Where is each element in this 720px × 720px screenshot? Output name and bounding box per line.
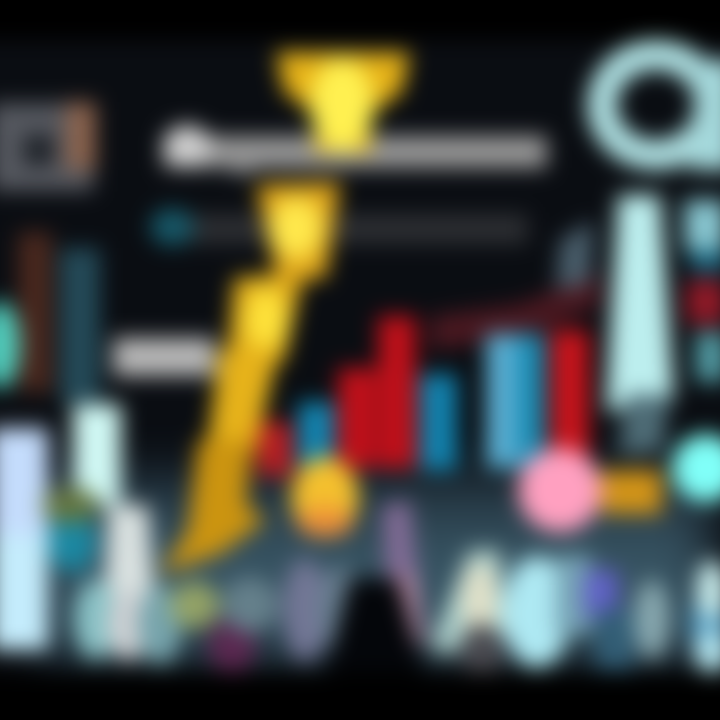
bottom black band (0, 672, 720, 720)
left column bars (0, 232, 100, 402)
orange tag (602, 470, 662, 514)
icon: golden trophy and lightning trail (160, 52, 410, 574)
right column (556, 195, 720, 412)
lower haze (40, 470, 710, 660)
dark silhouette (326, 578, 424, 672)
subtitle (150, 208, 528, 246)
title: Illegible title text (160, 133, 545, 175)
left tall panels (0, 404, 182, 665)
medal: yellow circle (291, 457, 359, 537)
top right ring (602, 55, 720, 170)
medal: pink circle (518, 448, 602, 532)
image panel: top left (0, 102, 96, 191)
top black band (0, 0, 720, 40)
centre figures (171, 395, 720, 676)
subtitle: Illegible subtitle text line (165, 220, 525, 242)
title (160, 125, 547, 175)
side label: Label (115, 343, 215, 379)
teal badge (672, 434, 720, 502)
bar chart (258, 272, 600, 476)
